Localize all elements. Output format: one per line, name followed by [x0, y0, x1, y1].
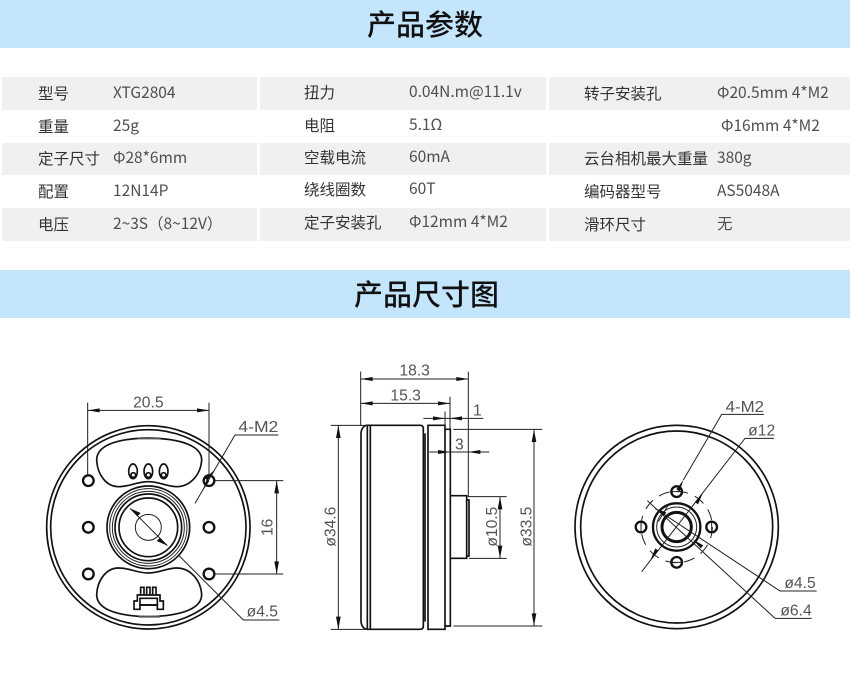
value: stator mounting holes: Φ12mm 4*M2: [409, 210, 508, 232]
value: winding turns: 60T: [409, 177, 436, 199]
dimension: diameter 10.5: ø10.5: [484, 506, 501, 547]
dimension: diameter 10.5: [469, 497, 507, 558]
label: no-load current: 空载电流: [304, 146, 366, 168]
label: weight: 重量: [38, 115, 69, 137]
value: no-load current: 60mA: [409, 145, 450, 167]
label: model: 型号: [38, 82, 69, 104]
callout: 4-M2: 4-M2: [726, 399, 764, 416]
heading banner: product dimensions: [0, 270, 850, 318]
row band 3 column 2: [260, 143, 546, 175]
label: resistance: 电阻: [304, 114, 335, 136]
row band 1 column 1: [2, 77, 257, 110]
value: voltage: 2~3S（8~12V）: [113, 212, 222, 234]
row band 3 column 1: [2, 143, 257, 175]
callout: diameter 4.5: [655, 508, 817, 592]
label: configuration: 配置: [38, 180, 69, 202]
label: max camera weight: 云台相机最大重量: [584, 147, 708, 169]
label: winding turns: 绕线圈数: [304, 178, 366, 200]
value: rotor mounting holes 1: Φ20.5mm 4*M2: [717, 81, 829, 103]
dimension: 15.3: [361, 387, 450, 429]
dimension: 16: [215, 481, 283, 574]
value: slip ring size: 无: [717, 212, 733, 234]
row band 5 column 1: [2, 208, 257, 241]
callout: 4-M2: [195, 419, 278, 503]
drawing: stator side view: [47, 394, 283, 629]
callout: diameter 6.4: ø6.4: [780, 602, 812, 619]
heading banner: product parameters: 产品参数: [367, 2, 483, 44]
dimension: 18.3: 18.3: [399, 362, 430, 379]
row band 1 column 2: [260, 77, 546, 110]
heading banner: product parameters: [0, 0, 850, 48]
value: weight: 25g: [113, 114, 139, 136]
parameter table: [2, 77, 850, 241]
callout: diameter 4.5: ø4.5: [247, 604, 278, 621]
callout: 4-M2: 4-M2: [238, 419, 278, 436]
dimension: 20.5: [88, 394, 209, 475]
heading banner: product dimensions: 产品尺寸图: [354, 272, 499, 314]
dimension: 3: 3: [455, 436, 464, 453]
label: stator size: 定子尺寸: [38, 147, 100, 169]
callout: diameter 12: ø12: [748, 422, 775, 439]
dimension: 1: [423, 402, 483, 428]
dimension: diameter 33.5: ø33.5: [518, 506, 535, 547]
dimension: 20.5: 20.5: [133, 394, 164, 411]
dimension: 16: 16: [260, 518, 277, 536]
icon: solder pads: [129, 464, 168, 479]
label: slip ring size: 滑环尺寸: [584, 213, 646, 235]
callout: 4-M2: [658, 399, 764, 522]
drawing: rotor side view: [575, 399, 817, 629]
dimension: 1: 1: [473, 402, 482, 419]
row band 1 column 3: [549, 77, 850, 110]
value: encoder model: AS5048A: [717, 179, 780, 201]
label: voltage: 电压: [38, 213, 69, 235]
callout: diameter 4.5: [130, 508, 279, 621]
label: rotor mounting holes: 转子安装孔: [584, 82, 662, 104]
callout: diameter 4.5: ø4.5: [784, 575, 816, 592]
dimension: 15.3: 15.3: [390, 387, 421, 404]
value: rotor mounting holes 2: Φ16mm 4*M2: [721, 114, 820, 136]
row band 5 column 3: [549, 208, 850, 241]
value: model: XTG2804: [113, 81, 176, 103]
value: resistance: 5.1Ω: [409, 113, 442, 135]
row band 3 column 3: [549, 143, 850, 175]
label: encoder model: 编码器型号: [584, 180, 662, 202]
value: stator size: Φ28*6mm: [113, 146, 187, 168]
dimension: 18.3: [361, 362, 507, 497]
dimension: diameter 33.5: [453, 429, 542, 626]
icon: connector: [134, 587, 163, 609]
dimension: 3: [429, 436, 489, 454]
value: configuration: 12N14P: [113, 179, 168, 201]
value: torque: 0.04N.m@11.1v: [409, 80, 522, 102]
label: stator mounting holes: 定子安装孔: [304, 211, 382, 233]
label: torque: 扭力: [304, 81, 335, 103]
callout: diameter 12: [642, 422, 775, 572]
dimension: diameter 34.6: [322, 425, 367, 629]
dimension: diameter 34.6: ø34.6: [322, 506, 339, 547]
callout: diameter 6.4: [647, 501, 812, 619]
value: max camera weight: 380g: [717, 146, 752, 168]
drawing: motor profile view: [322, 362, 542, 629]
row band 5 column 2: [260, 208, 546, 241]
